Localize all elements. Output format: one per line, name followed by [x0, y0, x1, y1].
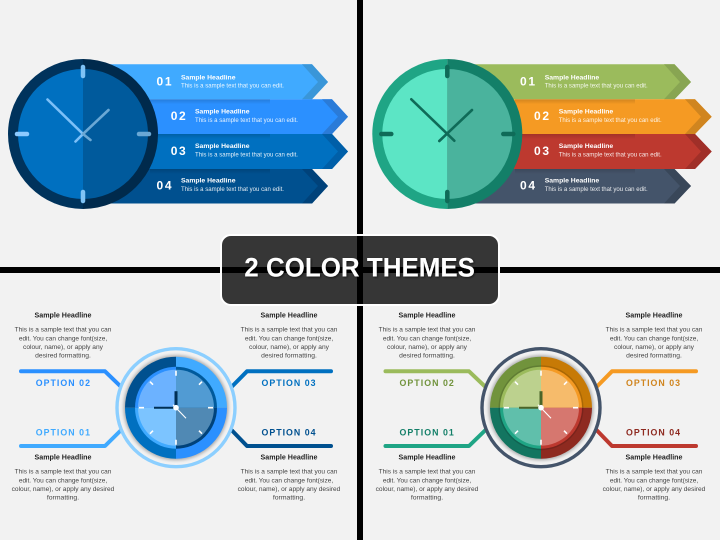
option 02 label: OPTION 02 — [400, 378, 454, 388]
panel: blue clock with arrows — [8, 59, 348, 209]
arrow row 1 — [447, 64, 691, 99]
option 03 line — [232, 371, 331, 386]
arrow row 3 — [83, 134, 348, 169]
title text: 2 COLOR THEMES — [244, 253, 475, 283]
arrow row 1: This is a sample text that you can edit. — [181, 82, 284, 89]
text block bottom right: Sample Headline — [626, 454, 683, 461]
text block bottom left: edit. You can change font(size, — [19, 477, 107, 484]
option 01 line — [21, 430, 121, 446]
text block bottom left: Sample Headline — [398, 454, 456, 461]
arrow row 1: Sample Headline — [545, 74, 599, 81]
panel: blue options clock — [12, 312, 341, 502]
text block bottom right: This is a sample text that you can — [606, 469, 703, 476]
title banner — [221, 235, 499, 305]
arrow row 4: This is a sample text that you can edit. — [181, 186, 284, 193]
text block bottom right — [238, 454, 341, 502]
option 01 label: OPTION 01 — [400, 428, 454, 438]
text block top right: desired formatting. — [626, 353, 682, 360]
arrow row 3: This is a sample text that you can edit. — [559, 151, 662, 158]
text block bottom right — [603, 454, 706, 502]
text block bottom left: This is a sample text that you can — [379, 469, 476, 476]
clock: multicolour quadrants — [482, 349, 600, 467]
text block top right: desired formatting. — [261, 353, 317, 360]
text block top left: This is a sample text that you can — [15, 327, 112, 334]
text block top left: edit. You can change font(size, — [19, 335, 107, 342]
arrow row 4: This is a sample text that you can edit. — [545, 186, 648, 193]
text block top right: This is a sample text that you can — [241, 327, 338, 334]
arrow row 3: 03 — [171, 144, 186, 158]
text block top left: edit. You can change font(size, — [383, 335, 471, 342]
clock: green — [372, 59, 522, 209]
text block top right: Sample Headline — [626, 312, 683, 319]
text block bottom left: edit. You can change font(size, — [383, 477, 471, 484]
option 03 label: OPTION 03 — [626, 378, 680, 388]
option 01 label: OPTION 01 — [36, 428, 90, 438]
text block top left: Sample Headline — [398, 312, 456, 319]
panel: multicolour options clock — [376, 312, 706, 502]
arrow row 1: 01 — [156, 74, 172, 88]
text block top left: colour, name), or apply any — [23, 344, 104, 351]
arrow row 3 — [447, 134, 712, 169]
text block bottom right: formatting. — [273, 495, 305, 502]
text block bottom left: Sample Headline — [34, 454, 92, 461]
text block top right: edit. You can change font(size, — [610, 335, 698, 342]
text block bottom left: This is a sample text that you can — [15, 469, 112, 476]
option 03 line — [597, 371, 696, 386]
arrow row 2: Sample Headline — [559, 109, 613, 116]
text block bottom right: edit. You can change font(size, — [245, 477, 333, 484]
arrow row 2: This is a sample text that you can edit. — [195, 117, 298, 124]
text block bottom left — [12, 454, 115, 502]
text block top left: This is a sample text that you can — [379, 327, 476, 334]
arrow row 3: This is a sample text that you can edit. — [195, 151, 298, 158]
option 02 line — [386, 371, 485, 386]
text block bottom right: colour, name), or apply any desired — [238, 486, 341, 493]
text block top left: Sample Headline — [34, 312, 92, 319]
arrow row 1 — [83, 64, 328, 99]
text block top left: desired formatting. — [35, 353, 91, 360]
arrow row 4: Sample Headline — [545, 178, 599, 185]
text block bottom left: colour, name), or apply any desired — [12, 486, 115, 493]
text block top left: desired formatting. — [399, 353, 455, 360]
option 02 label: OPTION 02 — [36, 378, 90, 388]
text block top right — [606, 312, 703, 360]
option 01 line — [386, 430, 485, 446]
arrow row 2: 02 — [171, 109, 186, 123]
clock: blue quadrants — [117, 349, 235, 467]
text block bottom right: Sample Headline — [260, 454, 318, 461]
text block top left — [15, 312, 112, 360]
arrow row 1: This is a sample text that you can edit. — [545, 82, 648, 89]
text block top right — [241, 312, 338, 360]
text block bottom left: formatting. — [411, 495, 443, 502]
arrow row 4: Sample Headline — [181, 178, 236, 185]
arrow row 2: This is a sample text that you can edit. — [559, 117, 662, 124]
arrow row 4 — [447, 169, 691, 204]
text block bottom left — [376, 454, 479, 502]
option 04 line — [597, 430, 696, 446]
clock: blue — [8, 59, 158, 209]
arrow row 3: Sample Headline — [559, 143, 613, 150]
panel: green clock with arrows — [372, 59, 712, 209]
arrow row 2 — [447, 99, 712, 134]
arrow row 4: 04 — [520, 178, 535, 192]
text block top right: edit. You can change font(size, — [245, 335, 333, 342]
text block top right: Sample Headline — [260, 312, 318, 319]
text block bottom left: formatting. — [47, 495, 79, 502]
text block bottom right: colour, name), or apply any desired — [603, 486, 706, 493]
text block bottom right: This is a sample text that you can — [241, 469, 338, 476]
arrow row 1: Sample Headline — [181, 74, 236, 81]
text block top left — [379, 312, 476, 360]
arrow row 4: 04 — [156, 178, 172, 192]
text block top left: colour, name), or apply any — [387, 344, 468, 351]
arrow row 2 — [83, 99, 348, 134]
text block top right: colour, name), or apply any — [614, 344, 695, 351]
option 04 label: OPTION 04 — [262, 428, 316, 438]
text block bottom right: formatting. — [638, 495, 670, 502]
arrow row 2: 02 — [534, 109, 549, 123]
option 03 label: OPTION 03 — [262, 378, 316, 388]
text block bottom left: colour, name), or apply any desired — [376, 486, 479, 493]
text block top right: colour, name), or apply any — [249, 344, 330, 351]
option 02 line — [21, 371, 121, 386]
arrow row 2: Sample Headline — [195, 109, 250, 116]
arrow row 3: Sample Headline — [195, 143, 250, 150]
text block bottom right: edit. You can change font(size, — [610, 477, 698, 484]
arrow row 4 — [83, 169, 328, 204]
option 04 line — [232, 430, 331, 446]
option 04 label: OPTION 04 — [626, 428, 680, 438]
text block top right: This is a sample text that you can — [606, 327, 703, 334]
arrow row 1: 01 — [520, 74, 535, 88]
arrow row 3: 03 — [534, 144, 549, 158]
